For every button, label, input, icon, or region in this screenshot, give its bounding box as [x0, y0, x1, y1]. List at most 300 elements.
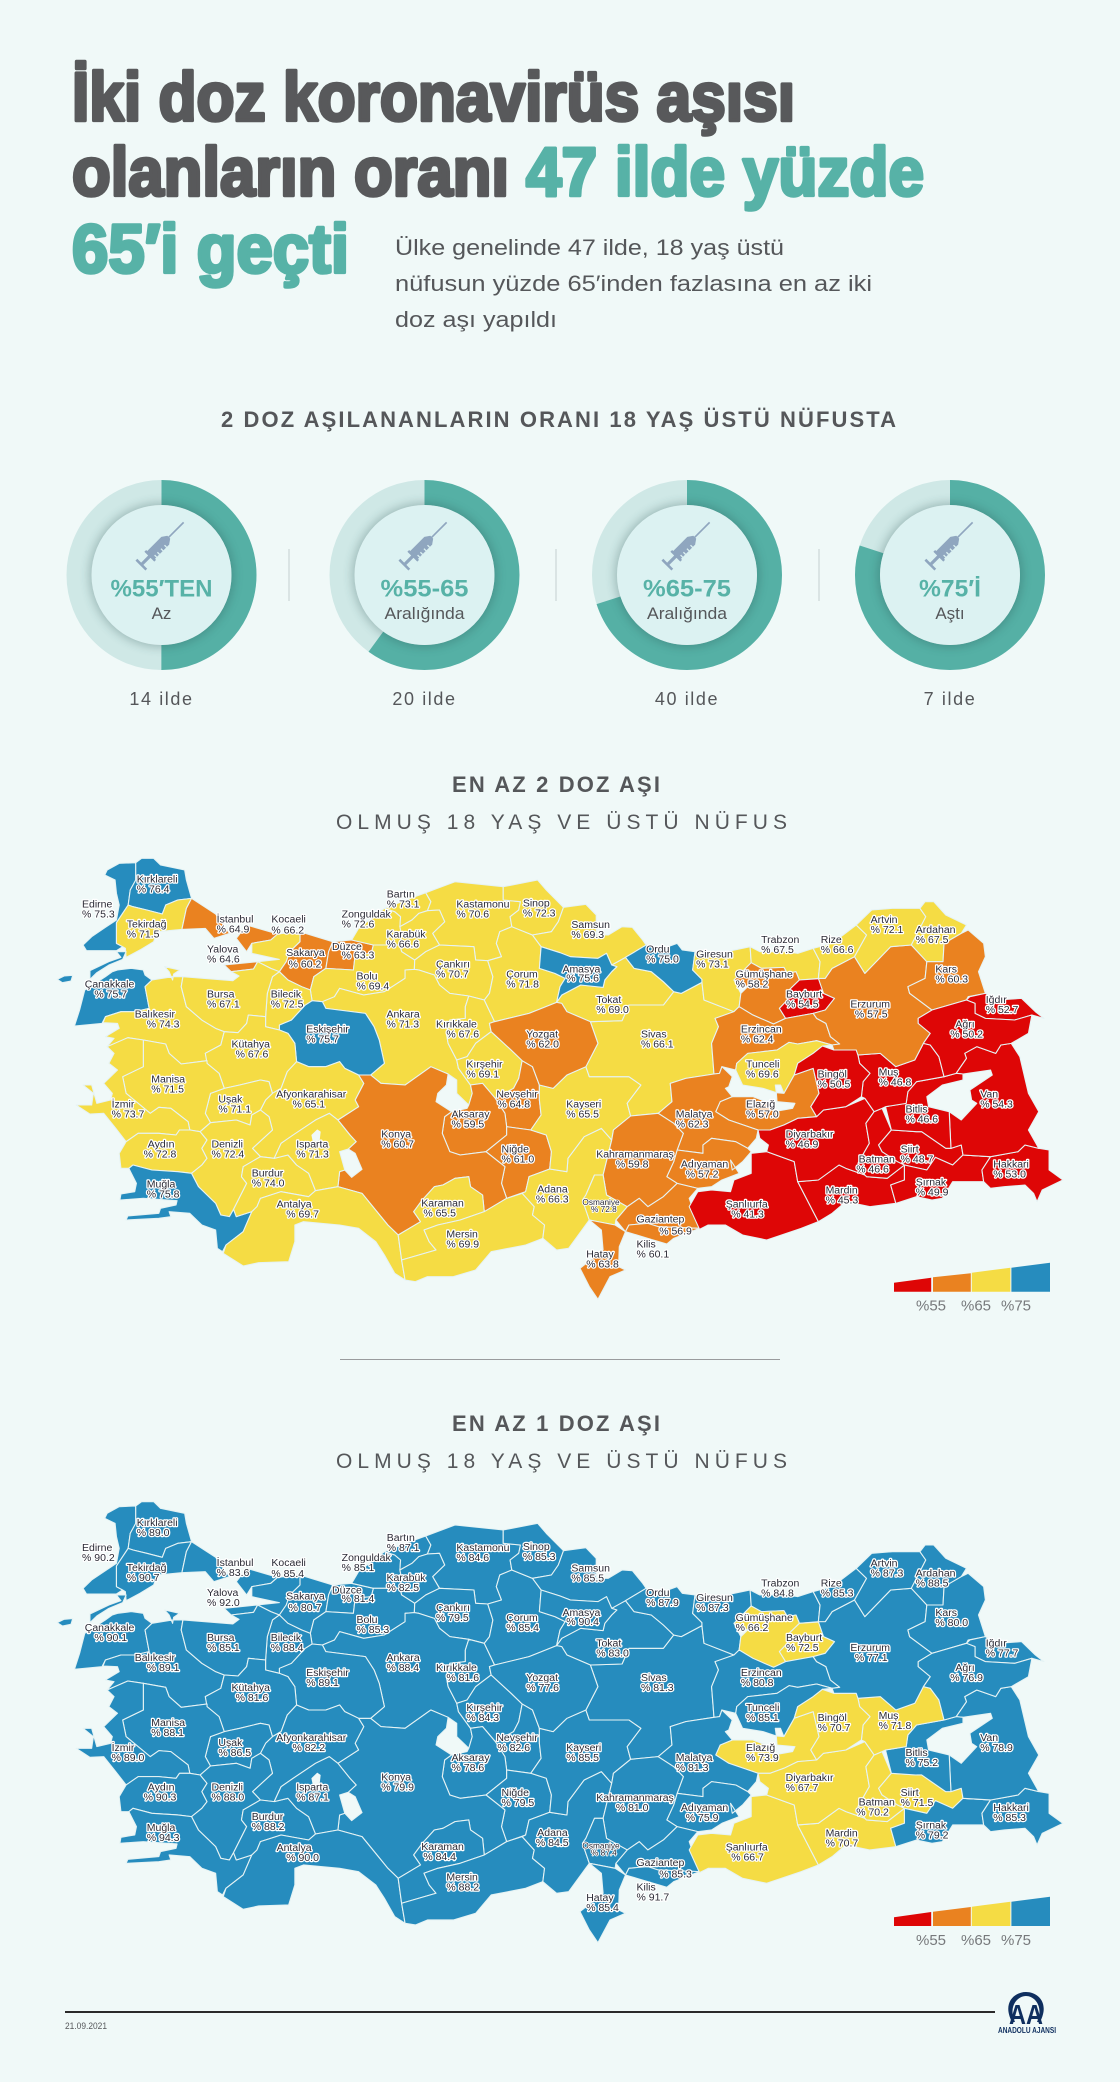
province labels, east: % 81.3	[641, 1683, 674, 1694]
province labels, west: % 90.1	[94, 1633, 127, 1644]
province labels, west: İzmir	[112, 1098, 135, 1111]
province labels, east: Kars	[935, 965, 957, 976]
province labels, west: % 73.7	[112, 1110, 145, 1121]
province labels, east: % 46.6	[856, 1164, 889, 1175]
province labels, west: Çankırı	[436, 960, 470, 971]
province labels, east: % 81.3	[676, 1763, 709, 1774]
province labels, east: Samsun	[571, 1563, 610, 1574]
province labels, east: Elazığ	[746, 1100, 775, 1111]
province labels, east: % 79.2	[916, 1831, 949, 1842]
heading: map 2 doses: OLMUŞ 18 YAŞ VE ÜSTÜ NÜFUS	[336, 811, 787, 834]
province labels, east	[562, 1558, 1029, 1914]
province labels, west: % 60.2	[289, 960, 322, 971]
province labels, west: % 79.5	[501, 1798, 534, 1809]
divider	[556, 549, 557, 601]
province labels, west: İzmir	[112, 1741, 135, 1754]
province labels, west: Isparta	[296, 1783, 329, 1794]
province labels, east: % 85.3	[993, 1813, 1026, 1824]
province labels, west: Afyonkarahisar	[276, 1090, 347, 1101]
heading: map 2 doses	[336, 772, 787, 834]
province labels, east: % 87.4	[591, 1848, 617, 1857]
province labels, west: Nevşehir	[496, 1090, 538, 1101]
province labels, east: Kilis	[637, 1239, 656, 1250]
province labels, west: % 90.3	[144, 1793, 177, 1804]
province labels, east: % 66.7	[731, 1853, 764, 1864]
province labels, west: Niğde	[501, 1788, 529, 1799]
province labels, east: % 41.3	[731, 1209, 764, 1220]
province labels, east: Tunceli	[746, 1703, 779, 1714]
province labels, west: % 88.1	[151, 1728, 184, 1739]
province labels, west: Edirne	[82, 1543, 113, 1554]
province labels, west: Kocaeli	[271, 1558, 306, 1569]
legend: map 1 dose: %55	[916, 1932, 946, 1949]
province labels, west: Zonguldak	[342, 1553, 392, 1564]
intro text	[395, 235, 872, 332]
province labels, east: Kayseri	[566, 1100, 601, 1111]
province labels, west: Aydın	[148, 1139, 175, 1150]
province labels, west: Sakarya	[286, 948, 325, 959]
province labels, west: % 89.1	[147, 1663, 180, 1674]
province labels, west: Adana	[537, 1828, 568, 1839]
panel: donut over 75: Aştı	[935, 604, 965, 623]
province labels, west: Bursa	[207, 990, 235, 1001]
province labels, east: Batman	[859, 1798, 895, 1809]
province labels, east: Mardin	[826, 1185, 858, 1196]
province labels, west: % 66.2	[271, 926, 304, 937]
province labels, west: Çorum	[506, 1613, 538, 1624]
province labels, east: % 85.4	[586, 1903, 619, 1914]
province labels, east: Bayburt	[786, 990, 822, 1001]
heading: map 1 dose: EN AZ 1 DOZ AŞI	[452, 1411, 660, 1436]
heading: donut section: 2 DOZ AŞILANANLARIN ORANI 18 YAŞ ÜSTÜ NÜFUSTA	[221, 407, 896, 432]
province labels, west: Konya	[381, 1129, 411, 1140]
province labels, west: % 85.3	[523, 1552, 556, 1563]
province labels, west: % 71.3	[296, 1149, 329, 1160]
province labels, east: % 66.1	[641, 1040, 674, 1051]
province labels, west: % 70.7	[436, 970, 469, 981]
province labels, east: % 62.3	[676, 1120, 709, 1131]
province labels, east: % 83.0	[596, 1648, 629, 1659]
panel: donut 65-75	[604, 492, 770, 709]
province labels, west: Karaman	[421, 1199, 464, 1210]
province labels, east: Sivas	[641, 1673, 667, 1684]
province labels, east: % 87.3	[696, 1603, 729, 1614]
province labels, west: Uşak	[218, 1095, 243, 1106]
province labels, west: % 89.0	[112, 1753, 145, 1764]
province labels, west: Karabük	[386, 1573, 426, 1584]
province labels, east: % 67.5	[916, 935, 949, 946]
province labels, west: Antalya	[277, 1843, 312, 1854]
panel: donut 55-65	[342, 492, 507, 709]
province labels, west: % 78.6	[452, 1763, 484, 1774]
province labels, west: % 90.7	[127, 1573, 160, 1584]
province labels, west: % 75.3	[82, 910, 115, 921]
province labels, east: % 72.5	[786, 1643, 819, 1654]
province labels, east: % 69.3	[571, 930, 604, 941]
province labels, west: % 88.2	[446, 1883, 479, 1894]
province labels, west: % 69.9	[446, 1239, 479, 1250]
province labels, west: % 64.9	[217, 925, 250, 936]
province labels, east: Trabzon	[761, 935, 800, 946]
province labels, east: Kars	[935, 1608, 957, 1619]
province labels, east: % 49.9	[916, 1187, 949, 1198]
province labels, east: Hatay	[586, 1250, 614, 1261]
province labels, east: Siirt	[901, 1145, 919, 1156]
province labels, east: % 67.5	[761, 945, 794, 956]
title	[72, 58, 924, 288]
province labels, east: Osmaniye	[582, 1841, 620, 1850]
province labels, west: % 85.1	[207, 1643, 240, 1654]
province labels, west: % 90.0	[286, 1853, 319, 1864]
province labels, west: % 69.4	[357, 982, 389, 993]
province labels, east: Sivas	[641, 1030, 667, 1041]
province labels, west: % 88.0	[212, 1793, 244, 1804]
province labels, west: % 85.4	[271, 1569, 304, 1580]
province labels, west: % 71.5	[151, 1085, 184, 1096]
province labels, west: % 66.3	[536, 1195, 569, 1206]
province labels, west: Sakarya	[286, 1591, 325, 1602]
province labels, west	[82, 875, 569, 1250]
logo: Anadolu Ajansı: AA	[1009, 1999, 1043, 2030]
province labels, west: Bolu	[357, 1615, 378, 1626]
province labels, west: Düzce	[332, 942, 362, 953]
province labels, west: Karaman	[421, 1842, 464, 1853]
province labels, west: Adana	[537, 1185, 568, 1196]
province labels, east: % 73.9	[746, 1753, 779, 1764]
province labels, west: % 67.6	[236, 1050, 269, 1061]
province labels, west: % 76.4	[137, 885, 170, 896]
province labels, east: % 75.9	[686, 1813, 719, 1824]
province labels, west: Muğla	[147, 1180, 176, 1191]
province labels, east: Ordu	[646, 945, 670, 956]
province labels, west: Ankara	[386, 1653, 420, 1664]
province labels, west: Yalova	[207, 1588, 239, 1599]
province labels, east: % 85.3	[659, 1870, 692, 1881]
province labels, east: % 54.5	[786, 1000, 819, 1011]
province labels, west: % 71.5	[127, 930, 160, 941]
province labels, east: Adıyaman	[681, 1160, 728, 1171]
province labels, east: Diyarbakır	[786, 1773, 834, 1784]
province labels, east: Artvin	[871, 1558, 898, 1569]
province labels, west: % 82.2	[292, 1743, 325, 1754]
province labels, west: % 72.3	[523, 909, 556, 920]
province labels, east: Kahramanmaraş	[596, 1793, 674, 1804]
province labels, west: % 69.1	[466, 1070, 499, 1081]
province labels, west: Kırşehir	[466, 1703, 503, 1714]
province labels, east: Bingöl	[818, 1713, 847, 1724]
province labels, west: % 71.8	[506, 980, 539, 991]
province labels, west: % 85.4	[506, 1623, 539, 1634]
province labels, east: % 46.6	[905, 1115, 938, 1126]
province labels, west: Kastamonu	[456, 1543, 510, 1554]
province labels, west: Kırıkkale	[436, 1663, 477, 1674]
province labels, west: Uşak	[218, 1738, 243, 1749]
province labels, west: Çanakkale	[85, 1623, 135, 1634]
province labels, east: Şanlıurfa	[726, 1843, 768, 1854]
province labels, west: Yalova	[207, 945, 239, 956]
province labels, east: Diyarbakır	[786, 1130, 834, 1141]
province labels, east: % 63.8	[586, 1260, 619, 1271]
provinces coloured by one-dose rate	[57, 1502, 1063, 1943]
province labels, east: % 77.1	[855, 1653, 888, 1664]
legend: map 2 doses: %55	[916, 1298, 946, 1315]
province labels, west: % 94.3	[147, 1833, 180, 1844]
province labels, east: % 75.2	[905, 1758, 938, 1769]
province labels, west: Aydın	[148, 1783, 175, 1794]
province labels, east: % 50.2	[950, 1030, 983, 1041]
province labels, west: Çorum	[506, 970, 538, 981]
province labels, west: % 72.5	[271, 1000, 304, 1011]
legend: map 2 doses: %75	[1001, 1298, 1031, 1315]
panel: donut 65-75: 40 ilde	[655, 689, 719, 709]
province labels, east: % 85.3	[821, 1588, 854, 1599]
province labels, east: Ağrı	[955, 1020, 975, 1031]
province labels, east: Iğdır	[986, 995, 1007, 1006]
province labels, west: Manisa	[151, 1075, 185, 1086]
province labels, west: Afyonkarahisar	[276, 1733, 347, 1744]
province labels, east: % 72.1	[871, 925, 904, 936]
province labels, west: % 81.6	[446, 1673, 479, 1684]
province labels, west: % 73.1	[387, 900, 420, 911]
province labels, east: % 75.6	[566, 974, 599, 985]
province labels, west	[82, 1518, 569, 1894]
province labels, west: % 77.6	[526, 1683, 559, 1694]
province labels, east: Kayseri	[566, 1743, 601, 1754]
province labels, west: Kastamonu	[456, 900, 510, 911]
province labels, west: Kütahya	[231, 1040, 270, 1051]
panel: donut under 55: Az	[152, 604, 171, 623]
province labels, east: % 67.7	[786, 1783, 819, 1794]
province labels, east: Bingöl	[818, 1070, 847, 1081]
province labels, east: Iğdır	[986, 1638, 1007, 1649]
province labels, east: % 60.3	[935, 975, 968, 986]
province labels, west: Zonguldak	[342, 910, 392, 921]
province labels, east: Bitlis	[905, 1748, 928, 1759]
province labels, east: Şanlıurfa	[726, 1199, 768, 1210]
province labels, east: Ordu	[646, 1588, 670, 1599]
province labels, east: % 81.0	[616, 1803, 649, 1814]
province labels, west: % 64.8	[497, 1100, 530, 1111]
province labels, west: % 85.3	[357, 1625, 389, 1636]
province labels, west: % 82.5	[386, 1583, 419, 1594]
province labels, west: Bartın	[387, 1533, 415, 1544]
panel: donut over 75	[868, 492, 1032, 709]
province labels, east: Hakkari	[993, 1803, 1029, 1814]
intro text: nüfusun yüzde 65′inden fazlasına en az iki	[395, 271, 872, 296]
province labels, east: % 60.1	[637, 1249, 669, 1260]
province labels, west: Çanakkale	[85, 980, 135, 991]
province labels, west: Eskişehir	[306, 1668, 349, 1679]
province labels, east: % 87.3	[871, 1568, 904, 1579]
province labels, west: Balıkesir	[135, 1653, 176, 1664]
province labels, west: Karabük	[386, 930, 426, 941]
province labels, west: Balıkesir	[135, 1010, 176, 1021]
province labels, west: % 72.6	[342, 920, 375, 931]
date: 21.09.2021	[65, 2021, 107, 2032]
province labels, east: Muş	[879, 1711, 898, 1722]
province labels, west: % 66.6	[386, 940, 419, 951]
province labels, west: % 81.4	[342, 1594, 375, 1605]
province labels, east: Amasya	[562, 965, 601, 976]
province labels, east: Muş	[879, 1068, 898, 1079]
province labels, west: % 88.4	[386, 1663, 419, 1674]
province labels, west: Denizli	[212, 1783, 243, 1794]
panel: donut 65-75: Aralığında	[647, 604, 728, 623]
title: İki doz koronavirüs aşısı	[72, 58, 795, 136]
province labels, west: Nevşehir	[496, 1733, 538, 1744]
province labels, east: Trabzon	[761, 1578, 800, 1589]
province labels, east: Hakkari	[993, 1160, 1029, 1171]
province labels, east: % 80.8	[741, 1678, 774, 1689]
logo: Anadolu Ajansı: ANADOLU AJANSI	[998, 2026, 1056, 2035]
province labels, west: % 90.2	[82, 1553, 115, 1564]
province labels, east: % 76.9	[950, 1673, 983, 1684]
province labels, east: % 71.8	[879, 1721, 912, 1732]
province labels, east: Şırnak	[916, 1177, 947, 1188]
province labels, west: Yozgat	[526, 1030, 558, 1041]
province labels, west: % 67.1	[207, 1000, 240, 1011]
panel: donut under 55: 14 ilde	[129, 689, 194, 709]
province labels, west: Sinop	[523, 899, 550, 910]
province labels, east: Samsun	[571, 920, 610, 931]
province labels, east: Giresun	[696, 950, 733, 961]
province labels, east: % 54.3	[980, 1100, 1013, 1111]
province labels, east: % 72.8	[591, 1205, 617, 1214]
heading: map 1 dose	[336, 1411, 787, 1473]
province labels, east: Gümüşhane	[736, 970, 793, 981]
province labels, east: % 50.5	[818, 1080, 851, 1091]
title: 65′i geçti	[72, 210, 349, 288]
province labels, east: % 57.5	[855, 1010, 888, 1021]
province labels, east: % 46.8	[879, 1078, 912, 1089]
province labels, east: Adıyaman	[681, 1803, 728, 1814]
province labels, west: % 88.4	[271, 1643, 304, 1654]
province labels, east: Artvin	[871, 915, 898, 926]
province labels, west: % 62.0	[526, 1040, 559, 1051]
province labels, west: Manisa	[151, 1718, 185, 1729]
province labels, east: % 57.2	[686, 1170, 719, 1181]
province labels, west: Edirne	[82, 900, 113, 911]
province labels, east: % 71.5	[901, 1798, 934, 1809]
province labels, east: Gümüşhane	[736, 1613, 793, 1624]
legend: map 1 dose: %75	[1001, 1932, 1031, 1949]
province labels, west: Bartın	[387, 890, 415, 901]
province labels, west: % 84.3	[466, 1713, 499, 1724]
panel: donut 55-65: %55-65	[380, 576, 468, 602]
province labels, west: % 72.4	[212, 1149, 244, 1160]
province labels, west: Aksaray	[452, 1753, 490, 1764]
panel: donut under 55: %55′TEN	[110, 576, 212, 602]
province labels, east: Gaziantep	[637, 1215, 685, 1226]
province labels, west: % 89.0	[137, 1528, 170, 1539]
province labels, east: Tunceli	[746, 1060, 779, 1071]
province labels, east: Gaziantep	[637, 1858, 685, 1869]
province labels, west: % 67.6	[446, 1030, 479, 1041]
province labels, east: Malatya	[676, 1110, 713, 1121]
province labels, east: % 65.5	[566, 1110, 599, 1121]
province labels, west: Çankırı	[436, 1603, 470, 1614]
province labels, east: % 91.7	[637, 1893, 669, 1904]
province labels, east: Kilis	[637, 1883, 656, 1894]
province labels, east: % 45.3	[826, 1195, 859, 1206]
province labels, west: İstanbul	[217, 1556, 253, 1569]
province labels, east: Tokat	[596, 1638, 621, 1649]
map: at least 2 doses	[57, 858, 1063, 1299]
province labels, east: Hatay	[586, 1893, 614, 1904]
panel: donut 55-65: 20 ilde	[392, 689, 457, 709]
province labels, east: Rize	[821, 935, 842, 946]
province labels, west: Konya	[381, 1773, 411, 1784]
province labels, west: Tekirdağ	[127, 920, 167, 931]
province labels, east: % 69.6	[746, 1070, 779, 1081]
province labels, west: Kırklareli	[137, 875, 178, 886]
logo: Anadolu Ajansı	[998, 1992, 1056, 2035]
province labels, west: Muğla	[147, 1823, 176, 1834]
province labels, east: % 48.7	[901, 1155, 934, 1166]
province labels, west: % 63.3	[342, 951, 375, 962]
province labels, west: % 87.1	[296, 1793, 329, 1804]
province labels, east: % 66.2	[736, 1623, 769, 1634]
province labels, east: % 53.0	[993, 1170, 1026, 1181]
province labels, east: % 70.7	[818, 1723, 851, 1734]
province labels, east: % 73.1	[696, 960, 729, 971]
legend: map 2 doses: %65	[961, 1298, 991, 1315]
province labels, east: Erzurum	[850, 1000, 890, 1011]
province labels, east: Osmaniye	[582, 1198, 620, 1207]
province labels, east: % 57.0	[746, 1110, 779, 1121]
province labels, east: % 75.0	[646, 955, 679, 966]
province labels, west: Yozgat	[526, 1673, 558, 1684]
province labels, west: % 74.3	[147, 1020, 180, 1031]
province labels, west: % 59.5	[452, 1120, 484, 1131]
map: at least 1 dose	[57, 1502, 1063, 1943]
province labels, east: Giresun	[696, 1593, 733, 1604]
province labels, west: % 84.6	[456, 1553, 489, 1564]
province labels, east: Elazığ	[746, 1743, 775, 1754]
province labels, east: % 88.5	[916, 1578, 949, 1589]
province labels, west: Kırşehir	[466, 1060, 503, 1071]
province labels, west: Mersin	[446, 1229, 478, 1240]
province labels, west: % 71.1	[218, 1105, 251, 1116]
province labels, east: Van	[980, 1090, 998, 1101]
province labels, west: % 61.0	[501, 1155, 534, 1166]
province labels, east: % 59.8	[616, 1160, 649, 1171]
province labels, west: Düzce	[332, 1585, 362, 1596]
province labels, west: Kocaeli	[271, 915, 306, 926]
panel: donut 55-65: Aralığında	[384, 604, 465, 623]
intro text: Ülke genelinde 47 ilde, 18 yaş üstü	[395, 235, 784, 260]
title: 47 ilde yüzde	[526, 134, 924, 210]
province labels, east: % 78.9	[980, 1743, 1013, 1754]
province labels, west: % 81.6	[236, 1693, 269, 1704]
province labels, west: % 85.1	[342, 1563, 375, 1574]
province labels, east: % 62.4	[741, 1035, 774, 1046]
province labels, east: % 85.1	[746, 1713, 779, 1724]
province labels, west: % 69.7	[286, 1210, 319, 1221]
province labels, west: Bilecik	[271, 990, 302, 1001]
province labels, west: Tekirdağ	[127, 1563, 167, 1574]
province labels, east: Erzurum	[850, 1643, 890, 1654]
province labels, east: % 58.2	[736, 980, 769, 991]
province labels, east: Bayburt	[786, 1633, 822, 1644]
province labels, west: Sinop	[523, 1542, 550, 1553]
provinces coloured by two-dose rate	[57, 858, 1063, 1299]
province labels, west: % 60.7	[381, 1139, 414, 1150]
province labels, east: Amasya	[562, 1608, 601, 1619]
province labels, west: % 75.7	[94, 990, 127, 1001]
province labels, east: % 85.5	[571, 1573, 604, 1584]
province labels, west: Bursa	[207, 1633, 235, 1644]
